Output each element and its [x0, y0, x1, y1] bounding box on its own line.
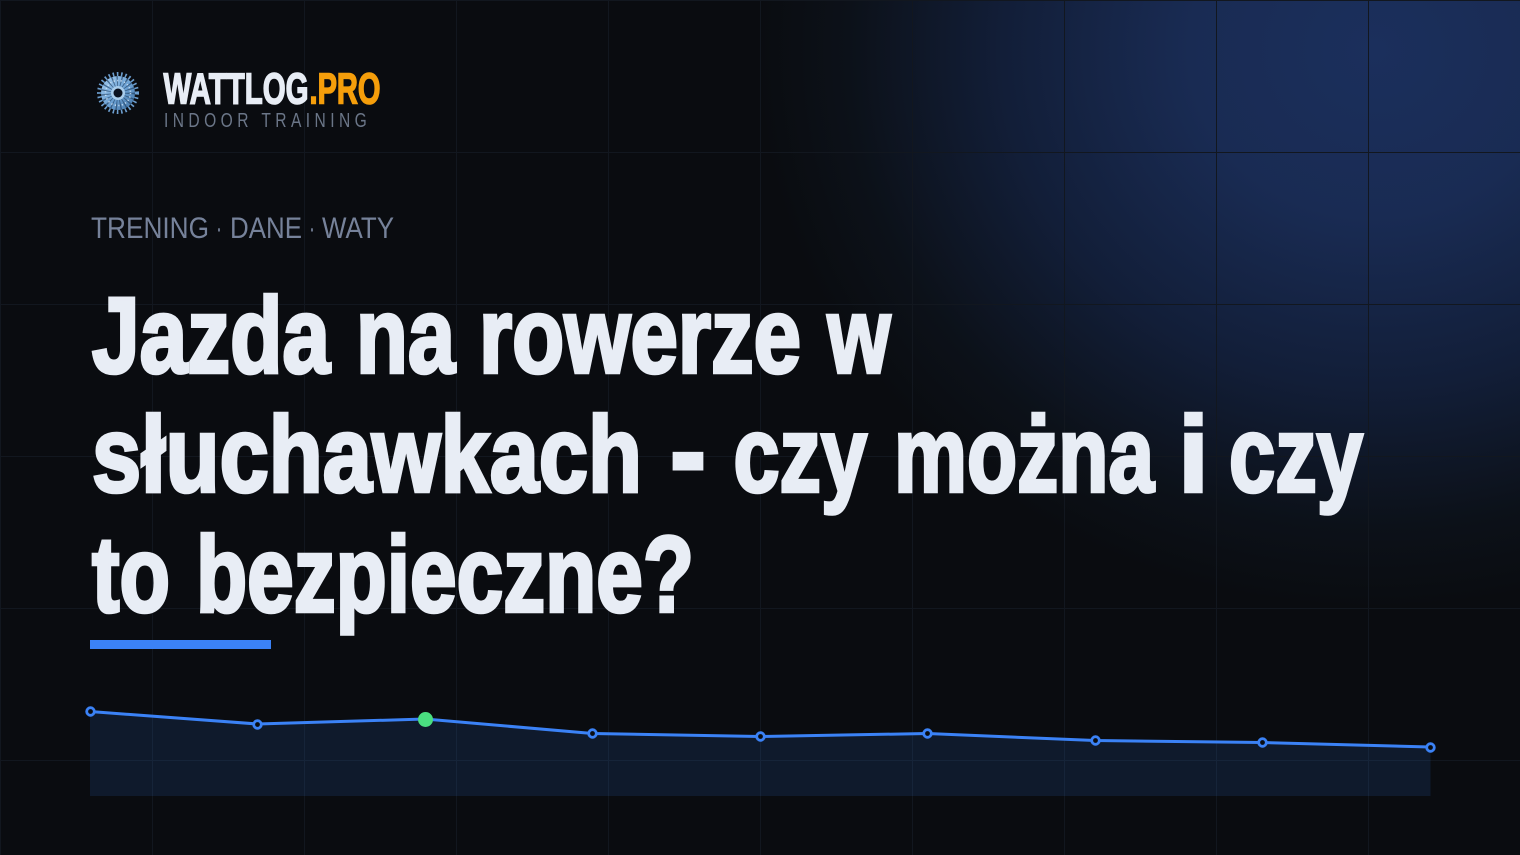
- highlighted data point: [418, 712, 433, 727]
- logo: [99, 64, 380, 131]
- kicker: WATY: [322, 212, 394, 245]
- brand name: WATTLOG: [164, 64, 308, 114]
- chart area: [90, 712, 1430, 796]
- kicker: ·: [216, 212, 222, 245]
- title: słuchawkach: [92, 394, 642, 514]
- title: [92, 274, 1363, 634]
- title: Jazda: [92, 274, 331, 396]
- title: bezpieczne?: [196, 514, 694, 634]
- kicker: ·: [309, 212, 315, 245]
- brand suffix: .PRO: [310, 64, 380, 114]
- line chart: [87, 708, 1434, 796]
- title: rowerze: [479, 274, 801, 396]
- title: –: [673, 392, 703, 513]
- tagline: INDOOR TRAINING: [164, 109, 367, 131]
- icon: bicycle cassette: [99, 74, 137, 112]
- kicker: TRENING: [91, 212, 209, 245]
- title: na: [356, 274, 456, 396]
- title: w: [827, 274, 891, 396]
- kicker: [91, 212, 394, 245]
- chart line: [90, 712, 1430, 747]
- data points: [87, 708, 1434, 751]
- title: można: [894, 394, 1155, 514]
- title: to: [92, 514, 170, 634]
- title: czy: [734, 394, 867, 514]
- kicker: DANE: [230, 212, 302, 245]
- title: i: [1178, 394, 1208, 514]
- title underline: [90, 640, 271, 649]
- title: czy: [1229, 394, 1363, 514]
